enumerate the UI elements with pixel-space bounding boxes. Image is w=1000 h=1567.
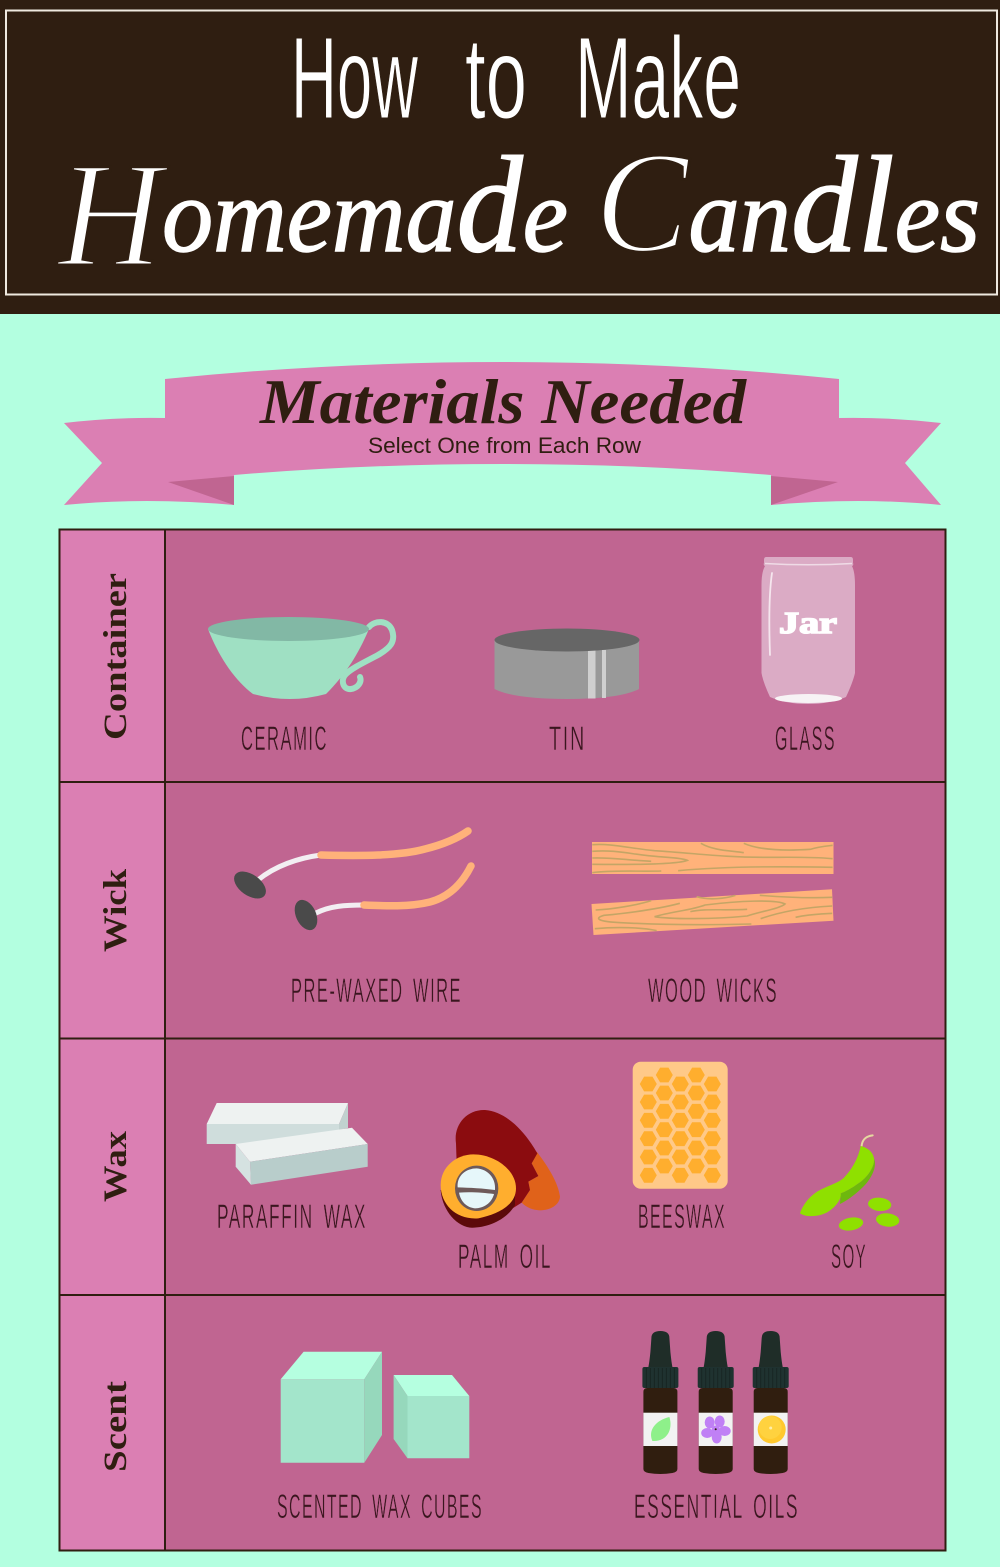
title line two: Candles — [595, 123, 980, 283]
icon: beeswax honeycomb — [633, 1062, 728, 1189]
title line one: How — [291, 13, 419, 143]
label: palm oil: PALM OIL — [458, 1238, 552, 1276]
icon: ceramic teacup — [208, 617, 393, 699]
title line one — [291, 13, 741, 143]
label: tin: TIN — [549, 720, 586, 758]
row label: container: Container — [98, 573, 134, 740]
icon: soy pod and beans — [800, 1135, 900, 1232]
title line one: Make — [575, 13, 741, 143]
row label: wax: Wax — [98, 1130, 134, 1202]
text: BEESWAX — [638, 1198, 726, 1236]
title line two: H — [56, 132, 170, 298]
row label: scent: Scent — [98, 1381, 134, 1472]
jar text: Jar — [779, 605, 837, 640]
icon: wood wicks — [592, 842, 834, 935]
title line two — [56, 123, 980, 298]
text: WOOD WICKS — [648, 972, 778, 1010]
icon: tin — [494, 628, 640, 699]
icon: paraffin wax bars — [207, 1103, 368, 1185]
icon: pre-waxed wire wicks — [229, 831, 471, 934]
label: paraffin wax: PARAFFIN WAX — [217, 1198, 367, 1236]
text: PRE-WAXED WIRE — [291, 972, 462, 1010]
row label: wick: Wick — [98, 868, 134, 952]
label: essential oils: ESSENTIAL OILS — [634, 1488, 799, 1526]
icon: essential oil bottle with lemon — [753, 1331, 789, 1474]
ribbon banner — [64, 362, 941, 505]
title line two: omema — [162, 157, 456, 274]
icon: palm oil fruit — [441, 1110, 560, 1228]
header — [0, 0, 1000, 314]
icon: essential oil bottle with leaf — [642, 1331, 678, 1474]
banner heading: Materials Needed — [259, 366, 747, 437]
text: SOY — [831, 1238, 867, 1276]
text: CERAMIC — [241, 720, 328, 758]
title line one: to — [465, 13, 527, 143]
icon: essential oil bottle with flower — [698, 1331, 734, 1474]
text: SCENTED WAX CUBES — [277, 1488, 483, 1526]
banner subheading: Select One from Each Row — [368, 433, 641, 458]
materials table — [59, 529, 946, 1551]
text: GLASS — [775, 720, 836, 758]
icon: glass jar — [762, 557, 855, 704]
title line two: de — [456, 128, 570, 281]
icon: scented wax cubes — [281, 1352, 469, 1463]
